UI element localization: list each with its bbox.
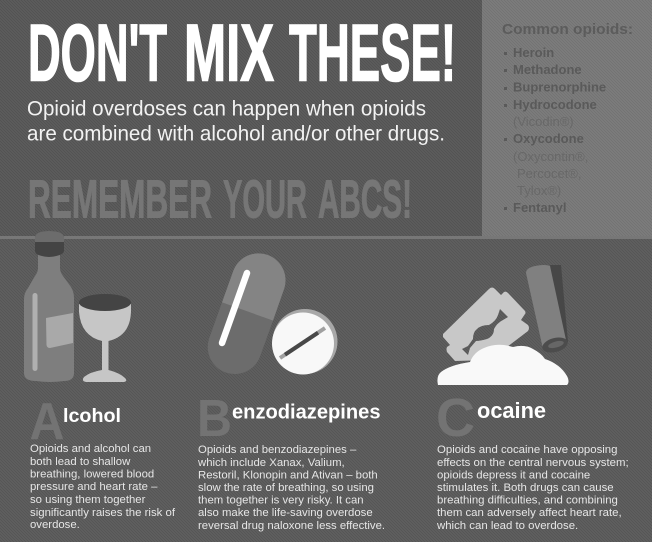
bottle xyxy=(24,231,74,382)
heading: ocaine xyxy=(477,398,546,423)
opioid list: (Oxycontin®, xyxy=(513,149,588,164)
body: them can adversely affect heart rate, xyxy=(437,507,622,519)
body: Opioids and alcohol can xyxy=(30,443,151,455)
opioid list: Tylox®) xyxy=(517,183,561,198)
body: which include Xanax, Valium, xyxy=(197,457,345,469)
body: which can lead to overdose. xyxy=(436,520,578,532)
letter C: C xyxy=(436,388,475,448)
body: significantly raises the risk of xyxy=(30,507,176,519)
body: pressure and heart rate – xyxy=(30,481,158,493)
body: Restoril, Klonopin and Ativan – both xyxy=(198,470,378,482)
body: slow the rate of breathing, so using xyxy=(198,482,374,494)
body: so using them together xyxy=(30,494,146,506)
body: them together is very risky. It can xyxy=(198,494,364,506)
intro text xyxy=(27,96,445,146)
body: stimulates it. Both drugs can cause xyxy=(437,482,614,494)
panel: common opioids xyxy=(482,0,652,236)
body: reversal drug naloxone less effective. xyxy=(198,520,385,532)
body: both lead to shallow xyxy=(30,456,131,468)
opioid list: Buprenorphine xyxy=(513,80,606,94)
icon: capsule and tablet xyxy=(208,253,338,374)
tablet xyxy=(272,309,338,374)
title: MIX xyxy=(184,8,274,98)
body: opioids depress it and cocaine xyxy=(437,470,590,482)
opioid list: Hydrocodone xyxy=(513,97,597,112)
body: breathing, lowered blood xyxy=(30,468,154,480)
body xyxy=(30,443,176,531)
opioid list: Percocet®, xyxy=(517,166,582,181)
opioid list: (Vicodin®) xyxy=(513,114,574,129)
heading: enzodiazepines xyxy=(232,402,381,424)
body: Opioids and cocaine have opposing xyxy=(437,444,617,456)
body: effects on the central nervous system; xyxy=(437,457,629,469)
capsule xyxy=(208,253,286,374)
title: THESE! xyxy=(289,8,456,98)
letter A: A xyxy=(30,393,64,451)
section: alcohol xyxy=(30,393,176,531)
intro text: Opioid overdoses can happen when opioids xyxy=(27,96,426,120)
body xyxy=(197,444,385,532)
heading: lcohol xyxy=(63,405,121,427)
body: overdose. xyxy=(30,519,80,531)
body: also make the life-saving overdose xyxy=(198,507,373,519)
icon: bottle and glass xyxy=(24,231,131,382)
section: cocaine xyxy=(436,388,629,532)
rolled straw xyxy=(526,265,569,355)
opioid list: Methadone xyxy=(513,62,582,77)
subheading: REMEMBER xyxy=(28,170,212,230)
subheading: YOUR xyxy=(223,170,307,230)
razor blade xyxy=(443,288,529,361)
intro text: are combined with alcohol and/or other drugs. xyxy=(27,122,445,146)
opioid list: Oxycodone xyxy=(513,131,584,146)
subheading: ABCS! xyxy=(318,170,412,230)
body xyxy=(436,444,629,532)
panel heading: Common opioids: xyxy=(502,22,633,38)
powder pile xyxy=(437,345,568,385)
section: benzodiazepines xyxy=(197,390,385,532)
body: Opioids and benzodiazepines – xyxy=(198,444,357,456)
wine glass xyxy=(79,294,131,382)
opioid list: Fentanyl xyxy=(513,200,566,215)
title xyxy=(28,8,456,98)
title: DON'T xyxy=(28,8,167,98)
body: breathing difficulties, and combining xyxy=(437,494,618,506)
opioid list: Heroin xyxy=(513,45,554,60)
icon: razor, straw and powder xyxy=(437,265,569,385)
letter B: B xyxy=(197,390,232,448)
opioid list xyxy=(504,45,606,215)
